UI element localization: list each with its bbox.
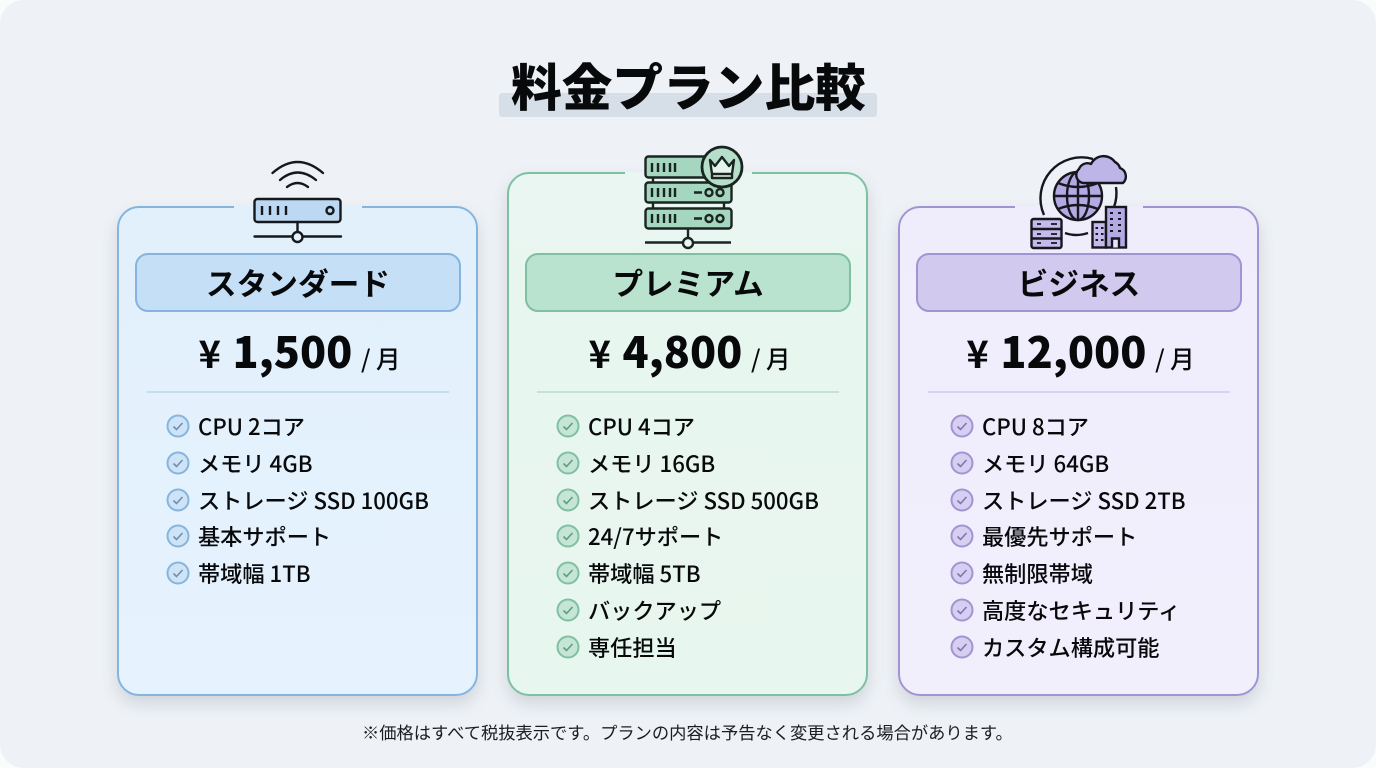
title text: 料金プラン比較	[511, 47, 866, 121]
feature item	[556, 594, 721, 626]
panel: standard plan	[117, 206, 478, 696]
feature list: standard: メモリ 4GB	[198, 447, 313, 479]
feature list: business: ストレージ SSD 2TB	[982, 484, 1186, 516]
price: business: ¥ 12,000 / 月	[966, 319, 1195, 381]
feature list: premium: CPU 4コア	[588, 410, 695, 442]
feature list: standard: CPU 2コア	[198, 410, 305, 442]
feature item	[166, 484, 429, 516]
panel: premium plan	[507, 172, 868, 696]
plan name: business: ビジネス	[1018, 259, 1140, 304]
feature list: standard	[166, 410, 429, 589]
feature item	[556, 484, 819, 516]
feature list: business: 最優先サポート	[982, 520, 1137, 552]
plan name: standard	[135, 253, 461, 312]
price: standard: ¥ 1,500 / 月	[198, 319, 401, 381]
icon: globe, cloud, server and buildings	[1030, 154, 1128, 250]
feature list: premium	[556, 410, 819, 663]
feature item	[166, 447, 313, 479]
feature list: business: 高度なセキュリティ	[982, 594, 1180, 626]
plan name: standard: スタンダード	[206, 259, 390, 304]
plan name: premium: プレミアム	[612, 259, 764, 304]
title	[499, 47, 877, 121]
feature item	[166, 557, 311, 589]
icon: router with wifi	[253, 160, 342, 244]
feature list: premium: 24/7サポート	[588, 520, 723, 552]
feature list: business: 無制限帯域	[982, 557, 1093, 589]
feature list: standard: 基本サポート	[198, 520, 331, 552]
feature item	[556, 520, 723, 552]
feature list: business: カスタム構成可能	[982, 631, 1160, 663]
price: premium: ¥ 4,800 / 月	[588, 319, 791, 381]
feature item	[166, 410, 305, 442]
footnote: ※価格はすべて税抜表示です。プランの内容は予告なく変更される場合があります。	[362, 719, 1013, 744]
feature list: premium: バックアップ	[588, 594, 721, 626]
feature item	[950, 447, 1109, 479]
feature item	[556, 557, 701, 589]
feature item	[556, 631, 677, 663]
feature item	[556, 410, 695, 442]
feature item	[950, 594, 1180, 626]
feature list: business: メモリ 64GB	[982, 447, 1109, 479]
icon: server rack with crown	[644, 146, 744, 250]
feature list: premium: メモリ 16GB	[588, 447, 715, 479]
feature list: standard: 帯域幅 1TB	[198, 557, 311, 589]
feature item	[166, 520, 331, 552]
feature item	[950, 484, 1186, 516]
feature list: business	[950, 410, 1186, 663]
feature item	[950, 631, 1160, 663]
plan name: premium	[525, 253, 851, 312]
feature list: premium: 帯域幅 5TB	[588, 557, 701, 589]
feature item	[950, 410, 1089, 442]
feature item	[950, 557, 1093, 589]
feature list: premium: 専任担当	[588, 631, 677, 663]
panel: business plan	[898, 206, 1259, 696]
plan name: business	[916, 253, 1242, 312]
feature list: premium: ストレージ SSD 500GB	[588, 484, 819, 516]
feature list: business: CPU 8コア	[982, 410, 1089, 442]
title underline band	[499, 93, 877, 117]
feature item	[950, 520, 1137, 552]
feature list: standard: ストレージ SSD 100GB	[198, 484, 429, 516]
feature item	[556, 447, 715, 479]
